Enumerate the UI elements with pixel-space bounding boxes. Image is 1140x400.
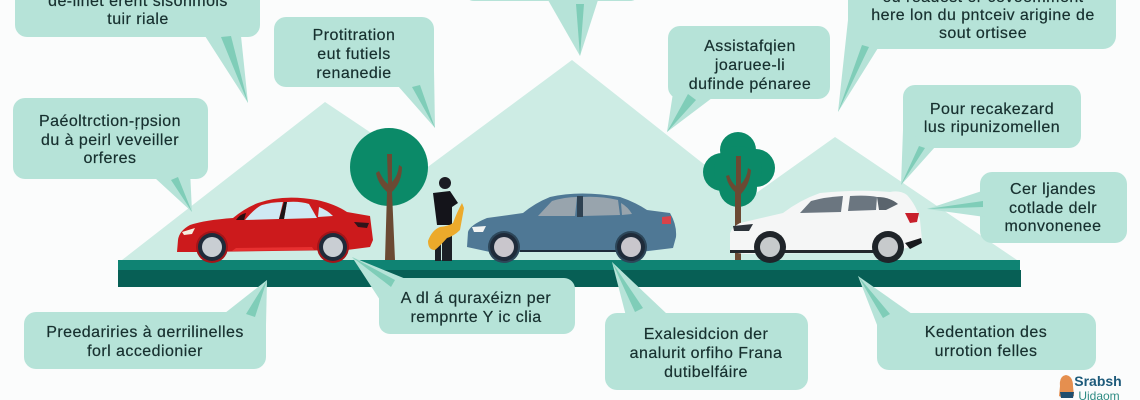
callout: protection: renanedie [316, 65, 392, 82]
callout: top right: sout ortisee [939, 25, 1027, 42]
callout: right [927, 172, 1127, 243]
callout: bottom centre: analurit orfiho Frana [630, 345, 782, 362]
person with yellow bag [428, 177, 464, 261]
callout: bottom middle: A dl á quraxéizn per [401, 290, 551, 307]
callout: bottom left [24, 280, 267, 369]
callout: assistance: dufinde pénaree [689, 76, 811, 93]
callout: protection: eut futiels [317, 46, 391, 63]
tree right [703, 132, 775, 260]
callout: left middle: orferes [84, 150, 136, 167]
white car [730, 191, 922, 263]
callout: top left [15, 0, 260, 103]
callout: bottom middle: rempnrte Y ic clia [410, 309, 542, 326]
callout: bottom centre: Exalesidcion der [644, 326, 769, 343]
callout: bottom centre: dutibelfáire [664, 364, 748, 381]
callout: right: monvonenee [1004, 218, 1102, 235]
callout: pour: Pour recakezard [930, 101, 1054, 118]
callout: top left: tuir riale [107, 11, 169, 28]
callout: assistance [667, 26, 830, 132]
callout: bottom right: urrotion felles [935, 343, 1037, 360]
road [118, 260, 1021, 287]
callout: protection [274, 17, 435, 128]
callout: top right [838, 0, 1116, 112]
callout: left middle: du à peirl veveiller [41, 132, 179, 149]
callout: pour [901, 85, 1081, 185]
callout: left middle: Paéoltrction-ŗpsion [39, 113, 181, 130]
callout: top right: here lon du pntceiv arigine de [871, 7, 1095, 24]
callout: bottom right [858, 276, 1096, 370]
callout: assistance: Assistafqien [704, 38, 796, 55]
red car [177, 198, 373, 263]
callout: bottom left: forl accedionier [87, 343, 203, 360]
callout: bottom centre [605, 262, 808, 390]
callout: protection: Protitration [313, 27, 395, 44]
blue car [467, 194, 676, 263]
callout: right: Cer ljandes [1010, 181, 1096, 198]
logo [1059, 373, 1122, 400]
callout: bottom right: Kedentation des [925, 324, 1047, 341]
tree left [350, 128, 428, 260]
callout: bottom left: Preedariries à ɑerrilinelles [46, 324, 244, 341]
mountains background [122, 60, 1017, 260]
callout: assistance: joaruee-li [714, 57, 785, 74]
callout: pour: lus ripunizomellen [924, 119, 1060, 136]
callout: bottom middle [352, 257, 575, 334]
callout: left middle [13, 98, 208, 212]
callout: top centre [464, 0, 640, 56]
callout: right: cotlade delr [1009, 200, 1097, 217]
logo: Srabsh [1074, 373, 1122, 389]
